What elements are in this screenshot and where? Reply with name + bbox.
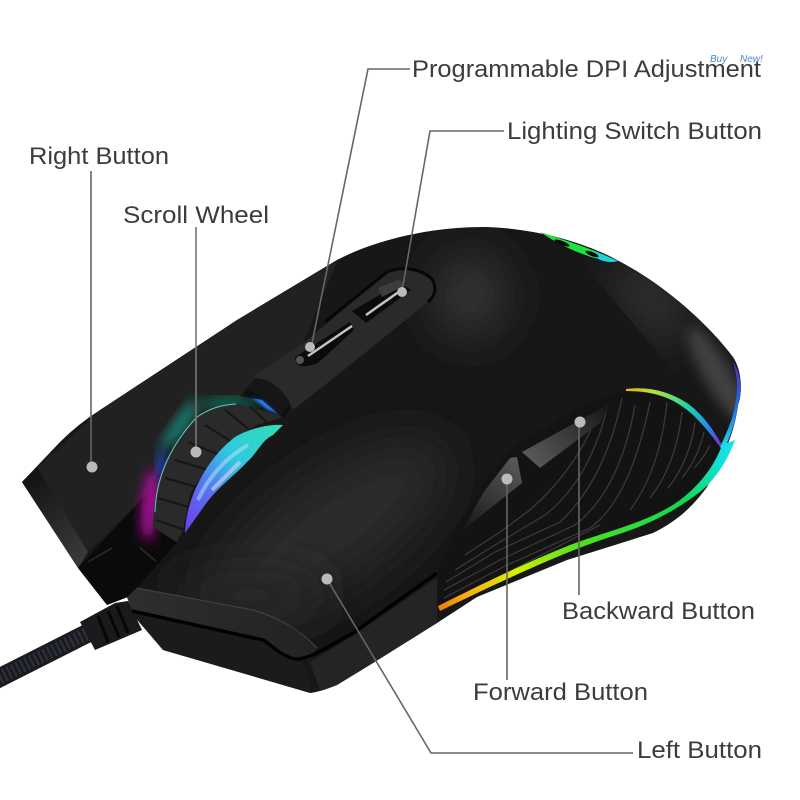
label: Backward Button: Backward Button [562,598,755,625]
side grip panel [438,391,722,607]
scroll channel [78,490,177,605]
forward button [463,457,522,530]
blue wheel highlight [250,396,283,415]
wheel dark gap [240,380,297,418]
callout: lighting switch [397,131,504,297]
backward button [522,402,613,468]
DPI button strip [245,269,435,415]
mouse body [22,227,741,693]
watermark: Buy New!: New! [740,54,763,65]
callout lines and dots [86,69,633,753]
callout: backward button [574,416,586,595]
logo light [540,232,618,262]
scroll wheel window [185,425,283,533]
label: Forward Button: Forward Button [473,679,648,706]
label: Programmable DPI Adjustment: Programmable DPI Adjustment [412,56,761,83]
watermark: Buy New!: Buy [710,54,728,65]
label: Scroll Wheel: Scroll Wheel [123,202,269,229]
label: Left Button: Left Button [637,737,762,764]
scroll wheel glow [139,397,260,542]
callout: scroll wheel [190,227,202,458]
callout: left button [322,574,633,753]
scroll wheel tread [153,404,283,542]
mouse illustration [0,227,758,693]
side RGB light strip [438,362,741,611]
cable [0,601,142,680]
left button edge [127,573,437,693]
channel details [88,548,156,562]
watermark: Buy New! [710,54,763,65]
right button front edge [22,467,88,568]
callout: right button [86,171,98,472]
body shading [22,253,758,655]
callout: forward button [502,474,512,680]
callout: programmable DPI [305,69,410,352]
label: Lighting Switch Button: Lighting Switch Button [507,118,762,145]
label: Right Button: Right Button [29,143,169,170]
